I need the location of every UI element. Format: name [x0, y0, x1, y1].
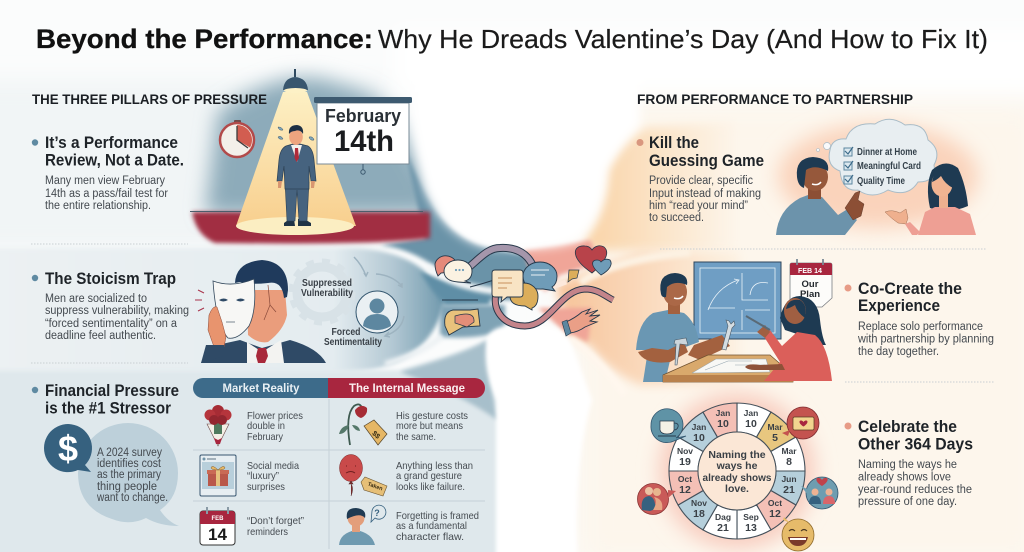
- step 2 heading: [858, 280, 962, 315]
- wheel dates: Dag: [715, 512, 731, 522]
- icon: dollar bubble: $: [58, 428, 78, 469]
- pillar 1 body: 14th as a pass/fail test for: [45, 188, 168, 200]
- text: gesture costs: His gesture costs: [396, 410, 468, 422]
- text: flower prices: [247, 410, 303, 443]
- calendar our plan: Our: [802, 279, 819, 290]
- text: social media: “luxury”: [247, 470, 279, 482]
- pillar 1 body: [45, 175, 168, 212]
- step 3 heading: [858, 418, 973, 454]
- icon: wilted rose with price tag: [339, 404, 387, 445]
- survey speech bubble: [44, 423, 179, 526]
- step 3 body: year-round reduces the: [858, 484, 972, 496]
- mask: [213, 279, 255, 338]
- pillar 3 heading: is the #1 Stressor: [45, 400, 172, 418]
- pillar 2 body: suppress vulnerability, making: [45, 305, 189, 317]
- hand left thumb: [455, 314, 474, 327]
- step 2 heading: Co-Create the: [858, 280, 962, 298]
- survey text: [96, 447, 168, 504]
- icon: hug bubble left: [638, 484, 676, 514]
- step 1 heading: [649, 134, 764, 170]
- wheel dates: Jan: [716, 408, 730, 418]
- step 1 body: Input instead of making: [649, 188, 761, 200]
- text: gesture costs: the same.: [396, 431, 436, 443]
- stage floor: [192, 212, 430, 243]
- wheel dates: Mar: [767, 422, 783, 432]
- gear: [291, 261, 353, 323]
- tangled ribbon: [468, 248, 613, 326]
- wheel dates: 13: [745, 522, 757, 534]
- icon: confused person: ?: [374, 508, 380, 518]
- label: forced sentimentality: Sentimentality: [324, 336, 382, 348]
- calendar our plan: Plan: [800, 289, 820, 300]
- text: reminders: reminders: [247, 526, 288, 538]
- text: social media: [247, 460, 299, 493]
- pillar 1 body: Many men view February: [45, 175, 165, 187]
- hand: [208, 307, 226, 347]
- drafting table: [663, 355, 793, 382]
- bullet: [32, 275, 38, 281]
- text: flower prices: double in: [247, 420, 285, 432]
- step 2 body: with partnership by planning: [857, 334, 994, 346]
- step 3 body: already shows love: [858, 472, 951, 484]
- illustration: couple with checklist cloud: [776, 119, 976, 235]
- step 2: co-create: [844, 280, 994, 358]
- icon: wilted rose with price tag: $$: [370, 430, 381, 441]
- checklist: [844, 146, 921, 187]
- text: grand gesture: [396, 460, 473, 493]
- text: grand gesture: Anything less than: [396, 460, 473, 472]
- cuff: [562, 320, 571, 336]
- presentation screen: 14th: [334, 125, 394, 158]
- ceiling lamp: [283, 69, 308, 93]
- hand right: [566, 309, 600, 333]
- text: social media: surprises: [247, 481, 285, 493]
- wheel dates: 21: [717, 522, 729, 534]
- pillar 2 heading: The Stoicism Trap: [45, 270, 176, 288]
- wheel dates: Sep: [743, 512, 759, 522]
- comparison table: [193, 378, 485, 549]
- wheel dates: Nov: [677, 446, 693, 456]
- step 3: celebrate: [844, 418, 973, 508]
- pillar 2 body: deadline feel authentic.: [45, 330, 156, 342]
- presentation screen: [314, 97, 412, 174]
- step 1 body: him “read your mind”: [649, 200, 748, 212]
- wheel centre: [698, 432, 776, 510]
- icon: confused person: [339, 505, 386, 545]
- text: flower prices: Flower prices: [247, 410, 303, 422]
- survey text: identifies cost: [97, 458, 162, 470]
- wheel dates: 5: [772, 432, 778, 444]
- illustration: spotlight stage: [190, 69, 430, 243]
- wheel dates: Jun: [781, 474, 797, 484]
- pillar 1: performance review: [32, 134, 184, 212]
- pillar 3 heading: [45, 382, 179, 418]
- step 3 body: [858, 459, 972, 508]
- survey text: want to change.: [96, 492, 168, 504]
- heading: from performance to partnership: FROM PERFORMANCE TO PARTNERSHIP: [637, 92, 913, 107]
- blueprint board: [694, 262, 781, 339]
- step 1 heading: Guessing Game: [649, 152, 764, 170]
- text: reminders: [247, 515, 304, 538]
- woman drawing: [745, 296, 832, 381]
- wheel dates: 10: [745, 418, 757, 430]
- spotlight cone: [236, 92, 356, 226]
- step 1: kill the guessing game: [636, 134, 764, 224]
- text: gesture costs: [396, 410, 468, 443]
- woman gesturing: [885, 163, 976, 235]
- bullet: [636, 139, 644, 146]
- label: suppressed vulnerability: Vulnerability: [301, 287, 353, 299]
- pillar 2 body: “forced sentimentality” on a: [45, 318, 178, 330]
- pillar 1 heading: [45, 134, 184, 170]
- wheel dates: 12: [769, 508, 781, 520]
- checklist: Meaningful Card: [857, 160, 921, 172]
- wheel segments: [669, 403, 805, 539]
- wheel centre: love.: [725, 483, 749, 495]
- wheel dates: 19: [679, 456, 691, 468]
- suit: [201, 340, 326, 363]
- wheel dates: Jan: [692, 422, 706, 432]
- wheel centre: already shows: [703, 473, 772, 484]
- survey text: thing people: [97, 481, 157, 493]
- pillar 1 body: the entire relationship.: [45, 200, 151, 212]
- calendar wheel: [669, 403, 805, 539]
- wheel dates: 12: [679, 484, 691, 496]
- pillar 1 heading: It’s a Performance: [45, 134, 178, 152]
- icon: smiling emoji bubble: [782, 517, 814, 551]
- wheel dates: Mar: [781, 446, 797, 456]
- checklist: Dinner at Home: [857, 146, 917, 158]
- text: character flaw: character flaw.: [396, 531, 464, 543]
- wheel dates: Nov: [691, 498, 707, 508]
- wheel centre: ways he: [716, 460, 758, 472]
- step 1 body: to succeed.: [649, 212, 704, 224]
- illustration: man removing mask: [195, 257, 404, 363]
- label: forced sentimentality: Forced: [332, 326, 360, 338]
- title: [36, 24, 988, 54]
- label: suppressed vulnerability: Suppressed: [302, 277, 352, 289]
- cycle arrows: [354, 257, 404, 337]
- table header: [193, 378, 485, 398]
- hair: [235, 260, 288, 298]
- pillar 2: stoicism trap: [32, 270, 189, 342]
- icon: calendar feb 14: FEB: [212, 516, 224, 522]
- step 1 body: Provide clear, specific: [649, 175, 753, 187]
- wheel centre: Naming the: [708, 449, 766, 461]
- calendar our plan: FEB 14: [798, 266, 823, 275]
- bullet: [844, 284, 852, 292]
- thought cloud: [816, 119, 937, 195]
- step 2 heading: Experience: [858, 297, 940, 315]
- text: character flaw: as a fundamental: [396, 520, 467, 532]
- calendar our plan: [790, 259, 832, 307]
- step 1 body: [649, 175, 761, 224]
- pillar 3: financial pressure: [32, 382, 179, 526]
- pillar 2 body: [45, 293, 189, 342]
- icon: sad balloon with tag: [340, 454, 387, 496]
- hand left: [445, 309, 480, 335]
- wheel dates: [677, 408, 797, 534]
- checklist: Quality Time: [857, 175, 905, 187]
- step 3 heading: Other 364 Days: [858, 436, 973, 454]
- wheel dates: 18: [693, 508, 705, 520]
- face: [247, 290, 287, 342]
- icon: coffee bubble: [651, 409, 686, 443]
- text: character flaw: [396, 510, 479, 543]
- small bubble: [568, 270, 579, 282]
- table header: The Internal Message: [349, 381, 465, 395]
- survey text: A 2024 survey: [97, 447, 162, 459]
- presentation screen: February: [325, 105, 402, 126]
- man with tools: [636, 273, 735, 382]
- wheel dates: 8: [786, 456, 792, 468]
- icon: couple bubble right: [801, 477, 838, 509]
- step 2 body: Replace solo performance: [858, 321, 983, 333]
- wheel dates: 10: [717, 418, 729, 430]
- title: Why He Dreads Valentine’s Day (And How to Fix It): [378, 24, 988, 54]
- title: Beyond the Performance:: [36, 24, 373, 54]
- wheel dates: 21: [783, 484, 795, 496]
- bullet: [32, 387, 38, 393]
- text: grand gesture: looks like failure.: [396, 481, 465, 493]
- pillar 2 body: Men are socialized to: [45, 293, 147, 305]
- illustration: co-creating the plan: [636, 259, 832, 382]
- icon: bouquet: [204, 405, 232, 446]
- wheel dates: Oct: [768, 498, 782, 508]
- wheel dates: 10: [693, 432, 705, 444]
- step 3 body: pressure of one day.: [858, 496, 957, 508]
- text: gesture costs: more but means: [396, 420, 463, 432]
- step 2 body: the day together.: [858, 346, 939, 358]
- hearts: [575, 246, 611, 275]
- pillar 1 heading: Review, Not a Date.: [45, 152, 184, 170]
- text: character flaw: Forgetting is framed: [396, 510, 479, 522]
- icon: calendar feb 14: 14: [208, 525, 227, 544]
- text: social media: Social media: [247, 460, 299, 472]
- text: flower prices: February: [247, 431, 284, 443]
- step 3 body: Naming the ways he: [858, 459, 957, 471]
- floor light pool: [236, 217, 354, 235]
- tension marks: [195, 290, 204, 311]
- label: forced sentimentality: [324, 326, 382, 348]
- wheel dates: Oct: [678, 474, 692, 484]
- speech bubbles: [435, 256, 557, 310]
- wall clock: [220, 120, 254, 157]
- wheel dates: Jan: [744, 408, 758, 418]
- label: suppressed vulnerability: [301, 277, 353, 299]
- pillar 3 heading: Financial Pressure: [45, 382, 179, 400]
- nervous man in suit: [277, 125, 316, 226]
- man pointing: [776, 157, 864, 235]
- icon: calendar feb 14: [200, 507, 235, 545]
- survey text: as the primary: [97, 469, 161, 481]
- step 3 heading: Celebrate the: [858, 418, 957, 436]
- icon: sad balloon with tag: Taken: [367, 482, 384, 493]
- icon: ticket bubble: [782, 407, 819, 439]
- heading: three pillars of pressure: THE THREE PILLARS OF PRESSURE: [32, 92, 267, 107]
- text: grand gesture: a grand gesture: [396, 470, 462, 482]
- step 2 body: [857, 321, 994, 358]
- icon: social media post: [200, 455, 236, 496]
- step 1 heading: Kill the: [649, 134, 699, 152]
- table header: Market Reality: [222, 381, 300, 395]
- bullet: [844, 422, 852, 430]
- icon: profile circle: [356, 291, 398, 333]
- text: reminders: “Don’t forget”: [247, 515, 304, 527]
- bullet: [32, 139, 38, 146]
- central tangled ribbon illustration: [435, 246, 613, 336]
